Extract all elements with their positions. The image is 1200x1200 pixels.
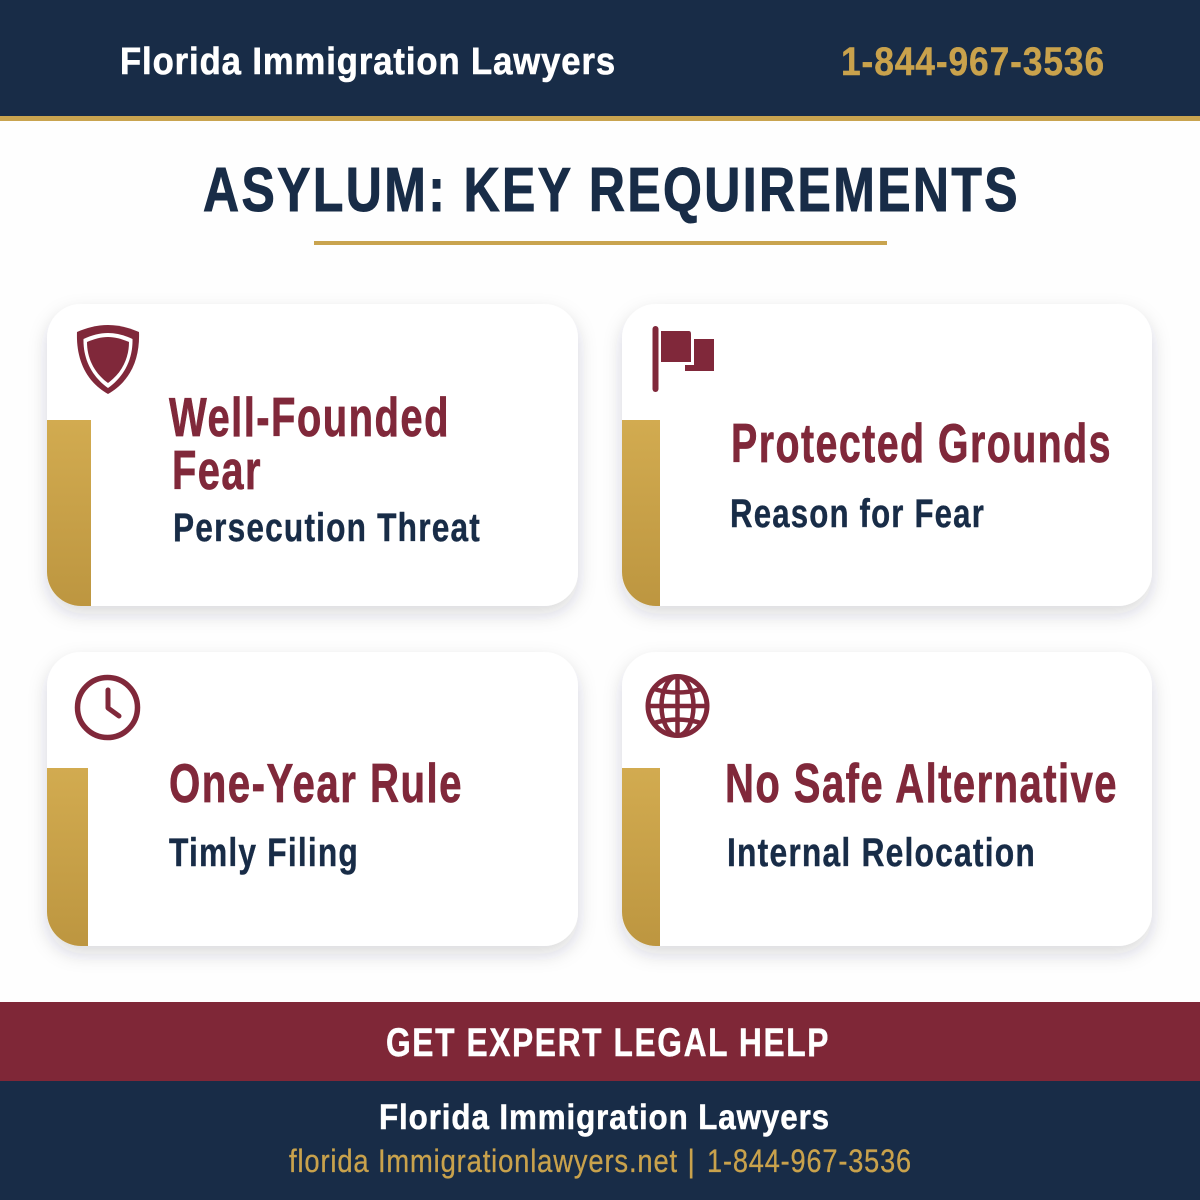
heading: well-founded fear bbox=[169, 386, 450, 501]
subheading: persecution threat: Persecution Threat bbox=[173, 506, 481, 550]
subheading: internal relocation: Internal Relocation bbox=[727, 831, 1036, 875]
footer contact line: 1-844-967-3536 bbox=[707, 1143, 912, 1179]
icon: clock bbox=[78, 678, 138, 738]
footer firm name: Florida Immigration Lawyers bbox=[379, 1098, 830, 1137]
header firm name: Florida Immigration Lawyers bbox=[120, 41, 616, 83]
subheading: reason for fear: Reason for Fear bbox=[730, 492, 985, 536]
panel: one-year rule bbox=[47, 652, 578, 946]
header phone number: 1-844-967-3536 bbox=[841, 40, 1105, 84]
heading: one-year rule: One-Year Rule bbox=[169, 752, 463, 814]
heading: well-founded fear: Well-Founded bbox=[169, 386, 450, 448]
icon: shield bbox=[77, 325, 139, 394]
icon: globe bbox=[648, 676, 707, 736]
call-to-action banner bbox=[0, 1002, 1200, 1082]
title: ASYLUM: KEY REQUIREMENTS bbox=[203, 156, 1020, 225]
footer contact line: | bbox=[687, 1143, 696, 1179]
call-to-action banner: GET EXPERT LEGAL HELP bbox=[386, 1021, 830, 1065]
footer bbox=[0, 1081, 1200, 1200]
header bar bbox=[0, 0, 1200, 121]
heading: well-founded fear: Fear bbox=[172, 439, 262, 501]
footer contact line: florida Immigrationlawyers.net bbox=[289, 1143, 678, 1179]
panel: no safe alternative bbox=[622, 652, 1152, 946]
panel: well-founded fear bbox=[47, 304, 578, 606]
subheading: timly filing: Timly Filing bbox=[169, 831, 359, 875]
panel: protected grounds bbox=[622, 304, 1152, 606]
title underline bbox=[314, 241, 887, 245]
icon: flag bbox=[652, 326, 714, 392]
